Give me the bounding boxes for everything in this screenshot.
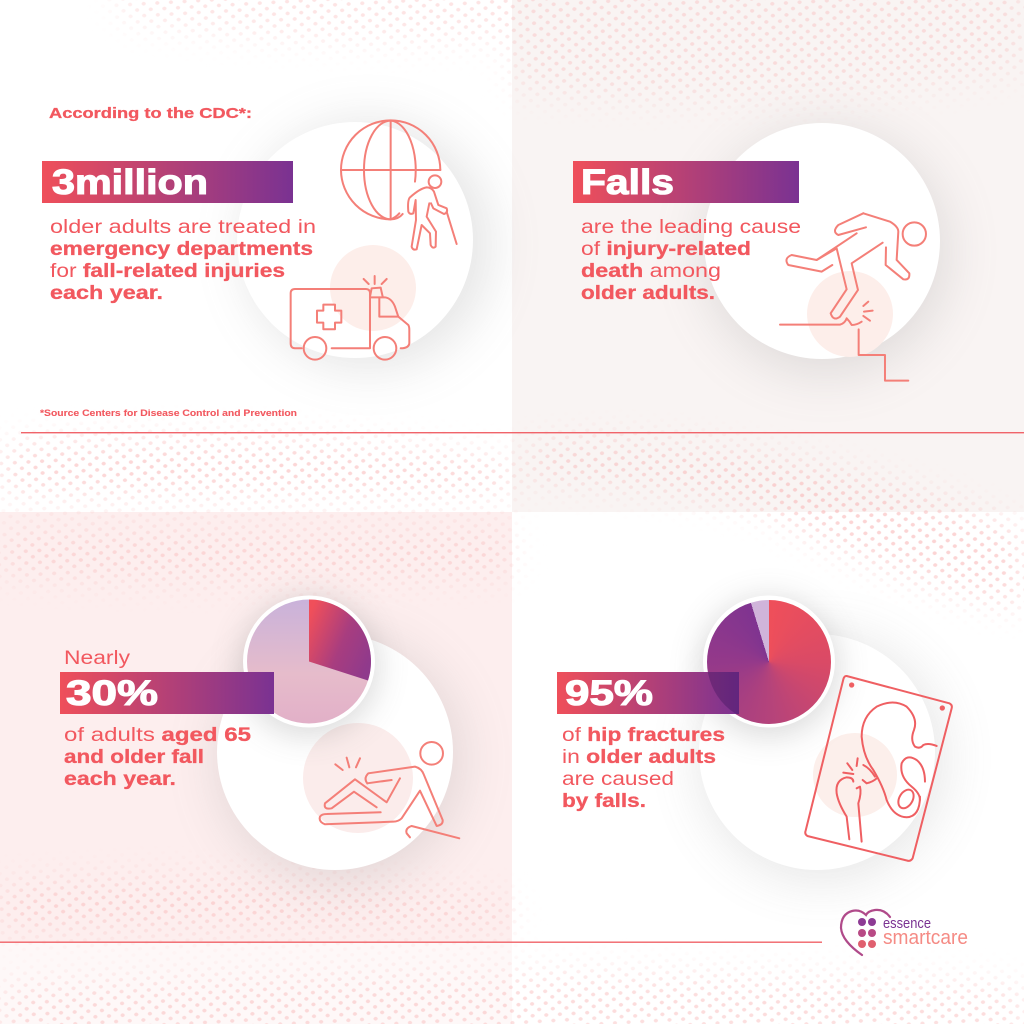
body copy	[50, 217, 316, 304]
body copy: each year.	[50, 283, 163, 304]
body copy	[64, 725, 252, 790]
text block: 3 million	[40, 105, 316, 419]
text block: 30%	[60, 648, 274, 790]
logo wordmark: essence	[883, 915, 931, 932]
big number: 95%	[565, 674, 653, 713]
panel: hip fractures	[699, 596, 952, 880]
icon: ambulance	[291, 276, 409, 360]
text block: falls	[573, 161, 801, 304]
body copy: each year.	[64, 769, 176, 790]
intro heading: According to the CDC*:	[49, 105, 252, 122]
bar: 95%	[557, 672, 739, 714]
body copy: for fall-related injuries	[50, 261, 285, 282]
bar: 3million	[42, 161, 293, 203]
lead word: Nearly	[64, 648, 131, 669]
logo dots	[858, 918, 876, 948]
pie overlap shade	[708, 672, 739, 714]
body copy	[581, 217, 801, 304]
body copy: are the leading cause	[581, 217, 801, 238]
logo heart	[841, 910, 890, 955]
icon: person falling on stairs	[780, 213, 926, 381]
body copy: of injury-related	[581, 239, 751, 260]
pie chart: 30%	[241, 596, 377, 735]
icon: older person with cane	[408, 175, 457, 250]
divider line bottom	[0, 942, 822, 943]
body copy: emergency departments	[50, 239, 313, 260]
text block: 95%	[557, 672, 739, 812]
divider line top	[21, 432, 1024, 433]
icon: hip x-ray	[805, 676, 952, 861]
body copy	[562, 725, 725, 812]
logo: essence smartcare	[841, 910, 968, 955]
big number: 30%	[66, 674, 158, 713]
body copy: in older adults	[562, 747, 716, 768]
big number: 3million	[52, 163, 208, 202]
bar: falls	[573, 161, 799, 203]
body copy: and older fall	[64, 747, 204, 768]
body copy: older adults are treated in	[50, 217, 316, 238]
body copy: by falls.	[562, 791, 646, 812]
icon: globe	[341, 120, 440, 219]
panel: emergency departments	[237, 120, 490, 367]
body copy: older adults.	[581, 283, 715, 304]
source note: *Source Centers for Disease Control and Prevention	[40, 408, 297, 419]
panel: leading cause	[704, 123, 948, 381]
pie chart: 95%	[701, 596, 837, 735]
body copy: are caused	[562, 769, 674, 790]
big word: Falls	[581, 163, 674, 202]
logo: essence smartcare: smartcare	[883, 927, 968, 949]
body copy: of adults aged 65	[64, 725, 252, 746]
body copy: of hip fractures	[562, 725, 725, 746]
bar: 30%	[60, 672, 274, 714]
icon: person sitting after fall	[320, 742, 459, 838]
body copy: death among	[581, 261, 721, 282]
panel: adults who fall	[217, 596, 462, 882]
